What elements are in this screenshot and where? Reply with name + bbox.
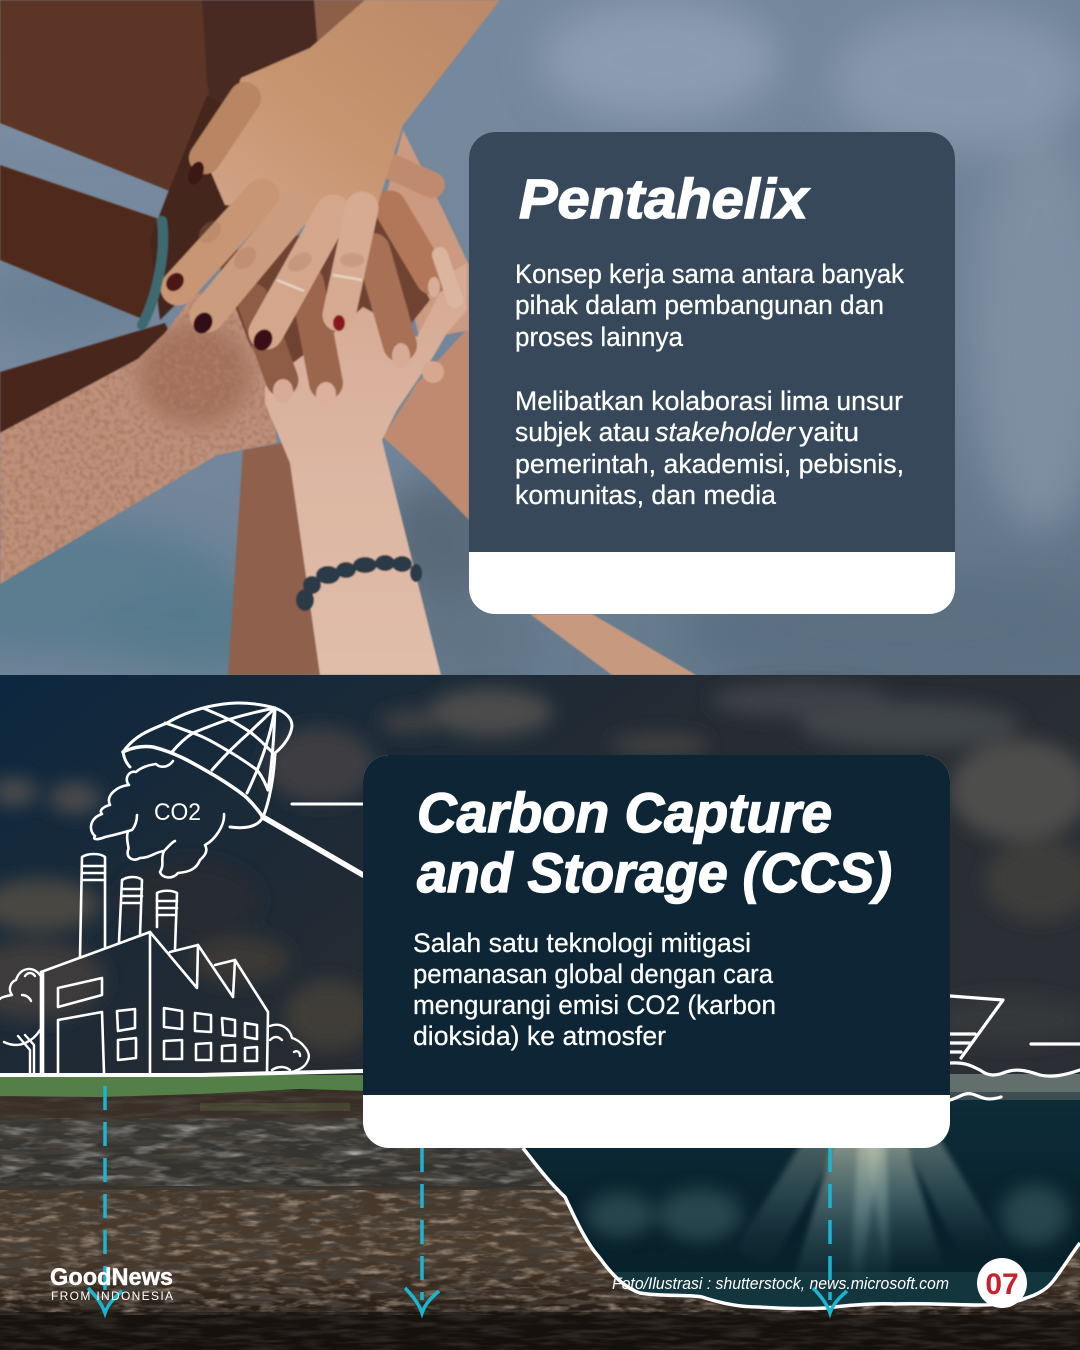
heading: Carbon Capture and Storage (CCS): Carbon Capture (417, 781, 832, 844)
text block: definition of pentahelix: Konsep kerja sama antara banyak (515, 259, 904, 289)
photo: underground soil layers (0, 1090, 1080, 1350)
text block: pentahelix stakeholders: stakeholder (655, 417, 796, 447)
text block: pentahelix stakeholders: Melibatkan kolaborasi lima unsur (515, 386, 903, 416)
text block: definition of pentahelix: pihak dalam pembangunan dan (515, 290, 884, 320)
text block: definition of CCS: pemanasan global dengan cara (413, 959, 774, 989)
photo: grass strip (0, 1075, 370, 1097)
text block: definition of CCS: Salah satu teknologi mitigasi (413, 928, 751, 958)
arrow: middle dashed injection line (405, 1148, 439, 1313)
photo: stacked hands against a cloudy sky (0, 0, 1080, 690)
text block: pentahelix stakeholders: subjek atau (515, 417, 650, 447)
heading: Carbon Capture and Storage (CCS): and Storage (CCS) (417, 841, 892, 904)
photo: night sky with clouds (0, 675, 1080, 1075)
text block: pentahelix stakeholders: yaitu (799, 417, 859, 447)
line art: CO2 smoke cloud (91, 761, 224, 877)
arrow: left dashed injection line (88, 1086, 122, 1313)
photo: sea surface (945, 1074, 1080, 1104)
text block: definition of CCS: mengurangi emisi CO2 (karbon (413, 990, 776, 1020)
text block: definition of pentahelix: proses lainnya (515, 322, 684, 352)
line art: water basin outline (523, 1148, 1080, 1309)
panel: Carbon Capture and Storage (363, 755, 950, 1148)
logo: GoodNews from Indonesia (50, 1264, 173, 1303)
line art: capture net (123, 703, 363, 875)
line art: factory (41, 854, 268, 1073)
page number badge (977, 1258, 1027, 1308)
heading: Carbon Capture and Storage (CCS) (417, 781, 892, 904)
text block: pentahelix stakeholders: pemerintah, akademisi, pebisnis, (515, 449, 904, 479)
heading: Pentahelix: Pentahelix (519, 167, 811, 230)
line art: trees (0, 969, 309, 1073)
line art: ground line (0, 1071, 363, 1075)
label: CO2: CO2 (154, 799, 201, 826)
text block: pentahelix stakeholders (515, 386, 904, 510)
line art: ship and waves (950, 996, 1080, 1100)
text block: definition of CCS (413, 928, 776, 1051)
logo: GoodNews from Indonesia: FROM INDONESIA (51, 1289, 173, 1303)
page number badge: 07 (985, 1268, 1019, 1301)
photo credit: Foto/Ilustrasi : shutterstock, news.microsoft.com (612, 1275, 949, 1293)
photo: underwater scene with light rays (500, 1100, 1080, 1320)
text block: definition of CCS: dioksida) ke atmosfer (413, 1021, 666, 1051)
panel: Pentahelix (469, 132, 955, 614)
arrow: right dashed injection line (813, 1148, 847, 1313)
text block: definition of pentahelix (515, 259, 904, 352)
text block: pentahelix stakeholders: komunitas, dan media (515, 480, 777, 510)
logo: GoodNews from Indonesia: GoodNews (50, 1264, 173, 1291)
